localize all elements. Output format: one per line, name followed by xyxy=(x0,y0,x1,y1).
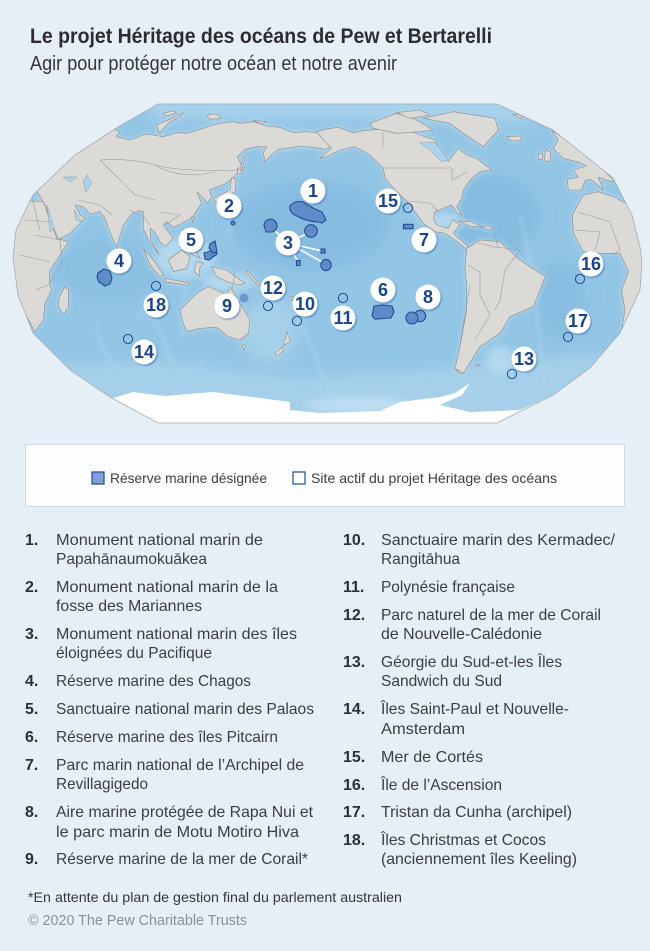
item 1 xyxy=(25,532,263,568)
numbered markers: 3 xyxy=(283,233,293,253)
item 12: Parc naturel de la mer de Corail xyxy=(381,607,601,624)
Antarctica xyxy=(113,383,547,423)
item 16: Île de l’Ascension xyxy=(380,775,502,794)
item 11: 11. xyxy=(343,579,364,596)
item 15: 15. xyxy=(343,749,365,766)
item 18: Îles Christmas et Cocos xyxy=(380,830,546,849)
item 10: Sanctuaire marin des Kermadec/ xyxy=(381,532,616,549)
item 2: fosse des Mariannes xyxy=(56,598,202,615)
active project sites xyxy=(123,203,585,379)
numbered markers: 12 xyxy=(263,278,283,298)
world map xyxy=(0,100,650,430)
coastal shelves xyxy=(13,110,642,374)
numbered markers: 4 xyxy=(114,251,124,271)
numbered markers: 2 xyxy=(224,196,234,216)
item 7: Parc marin national de l’Archipel de xyxy=(56,757,304,774)
list: right column xyxy=(343,532,616,868)
item 13: 13. xyxy=(343,654,365,671)
numbered markers: 6 xyxy=(378,280,388,300)
item 17: Tristan da Cunha (archipel) xyxy=(381,804,572,821)
item 14: 14. xyxy=(343,701,365,718)
item 10 xyxy=(343,532,616,568)
numbered markers: 14 xyxy=(134,342,154,362)
item 8 xyxy=(25,804,314,841)
item 2: Monument national marin de la xyxy=(56,579,278,596)
item 12 xyxy=(343,607,601,643)
item 15: Mer de Cortés xyxy=(381,749,483,766)
copyright: © 2020 The Pew Charitable Trusts xyxy=(28,913,247,929)
title: Le projet Héritage des océans de Pew et Bertarelli xyxy=(30,25,492,48)
numbered markers: 8 xyxy=(423,287,433,307)
subtitle: Agir pour protéger notre océan et notre avenir xyxy=(30,53,397,75)
item 5: 5. xyxy=(25,701,38,718)
item 7: Revillagigedo xyxy=(56,776,148,793)
item 17: 17. xyxy=(343,804,365,821)
legend: designated reserve: Réserve marine désignée xyxy=(110,470,267,486)
item 10: Rangitāhua xyxy=(381,551,460,568)
numbered markers: 7 xyxy=(419,230,429,250)
numbered markers: 13 xyxy=(514,349,534,369)
land masses xyxy=(13,110,642,374)
item 13: Géorgie du Sud-et-les Îles xyxy=(381,652,562,671)
item 6: 6. xyxy=(25,729,38,746)
numbered markers: 16 xyxy=(581,254,601,274)
item 16 xyxy=(343,775,502,794)
footnote: *En attente du plan de gestion final du parlement australien xyxy=(28,889,402,905)
item 5: Sanctuaire national marin des Palaos xyxy=(56,701,314,718)
item 13: Sandwich du Sud xyxy=(381,673,502,690)
numbered markers xyxy=(106,178,604,372)
item 7 xyxy=(25,757,304,793)
item 3: éloignées du Pacifique xyxy=(56,645,212,662)
item 18: (anciennement îles Keeling) xyxy=(381,851,577,868)
marine reserve of the Coral Sea xyxy=(240,294,248,302)
numbered markers: 5 xyxy=(186,230,196,250)
numbered markers: 15 xyxy=(378,191,398,211)
numbered markers: 10 xyxy=(295,294,315,314)
item 16: 16. xyxy=(343,777,365,794)
item 2 xyxy=(25,579,278,615)
item 8: Aire marine protégée de Rapa Nui et xyxy=(56,804,314,821)
leader lines for site 3 xyxy=(273,229,324,263)
item 11: Polynésie française xyxy=(381,579,515,596)
item 14: Îles Saint-Paul et Nouvelle- xyxy=(380,699,569,718)
numbered markers: 9 xyxy=(222,296,232,316)
item 8: 8. xyxy=(25,804,38,821)
list: left column xyxy=(25,532,314,868)
item 4: Réserve marine des Chagos xyxy=(56,673,251,690)
item 18: 18. xyxy=(343,832,365,849)
item 10: 10. xyxy=(343,532,365,549)
designated reserves xyxy=(97,202,426,324)
numbered markers: 1 xyxy=(308,181,318,201)
Hudson Bay, Caspian and inland seas xyxy=(47,142,448,232)
item 1: Papahānaumokuākea xyxy=(56,551,207,568)
numbered markers: 17 xyxy=(568,311,588,331)
item 14: Amsterdam xyxy=(381,721,465,738)
country borders xyxy=(20,132,620,345)
item 13 xyxy=(343,652,562,690)
item 12: 12. xyxy=(343,607,365,624)
item 18 xyxy=(343,830,577,868)
item 3: Monument national marin des îles xyxy=(56,626,297,643)
item 3 xyxy=(25,626,297,662)
item 9: Réserve marine de la mer de Corail* xyxy=(56,851,308,868)
item 12: de Nouvelle-Calédonie xyxy=(381,626,542,643)
item 14 xyxy=(343,699,569,738)
legend: active site: Site actif du projet Héritage des océans xyxy=(311,470,557,486)
item 7: 7. xyxy=(25,757,38,774)
numbered markers: 11 xyxy=(333,308,353,328)
item 4: 4. xyxy=(25,673,38,690)
item 6: Réserve marine des îles Pitcairn xyxy=(56,729,278,746)
item 9: 9. xyxy=(25,851,38,868)
legend panel xyxy=(26,444,624,506)
item 2: 2. xyxy=(25,579,38,596)
item 3: 3. xyxy=(25,626,38,643)
item 1: Monument national marin de xyxy=(56,532,263,549)
item 1: 1. xyxy=(25,532,38,549)
item 8: le parc marin de Motu Motiro Hiva xyxy=(56,824,299,841)
numbered markers: 18 xyxy=(146,295,166,315)
